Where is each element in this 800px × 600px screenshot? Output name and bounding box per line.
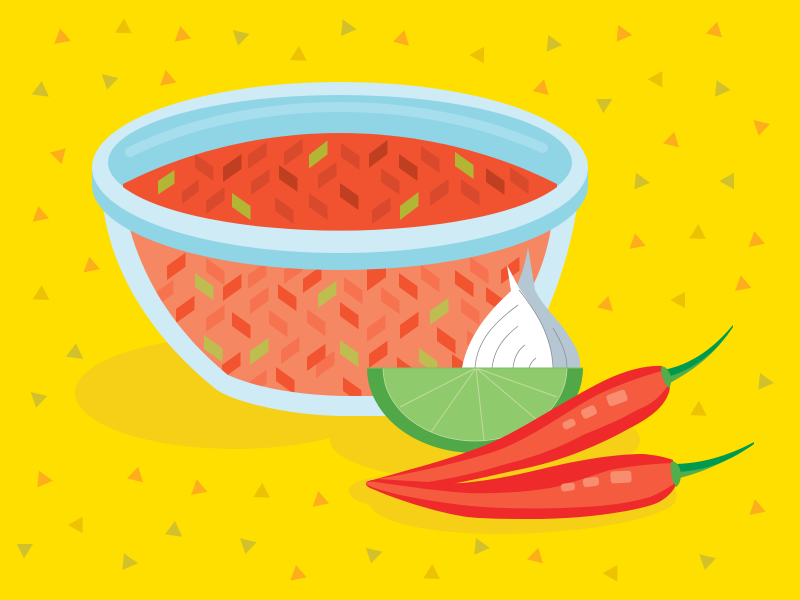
- chili body: [366, 366, 670, 488]
- onion: [462, 247, 580, 368]
- rim underside: [92, 168, 588, 270]
- chili pepper: top: [366, 325, 733, 488]
- rim: [92, 82, 588, 253]
- dark yellow confetti triangles: [33, 18, 707, 582]
- bowl glass body: [103, 200, 578, 416]
- lime segments: [400, 368, 557, 440]
- chili flesh: [366, 463, 675, 508]
- chili pepper: bottom: [366, 442, 754, 519]
- calyx: [661, 367, 671, 388]
- onion layer lines: [475, 290, 567, 368]
- onion skin: [515, 247, 580, 368]
- bowl interior: [108, 95, 572, 230]
- onion flesh: [462, 265, 553, 368]
- salsa seen through the glass: [128, 222, 552, 404]
- bowl: [92, 82, 588, 416]
- lime rind: [367, 368, 583, 453]
- lime flesh: [383, 368, 567, 441]
- chili body: [366, 454, 677, 519]
- inner glass highlight: [130, 107, 543, 152]
- chili highlights: [561, 470, 632, 492]
- stem: [663, 326, 732, 384]
- ground shadows: [75, 337, 677, 534]
- lime wedge: [367, 368, 583, 453]
- calyx: [671, 462, 681, 487]
- chili flesh: [377, 370, 668, 482]
- salsa surface: [123, 133, 557, 231]
- chili highlights: [561, 389, 628, 430]
- stem: [674, 443, 753, 479]
